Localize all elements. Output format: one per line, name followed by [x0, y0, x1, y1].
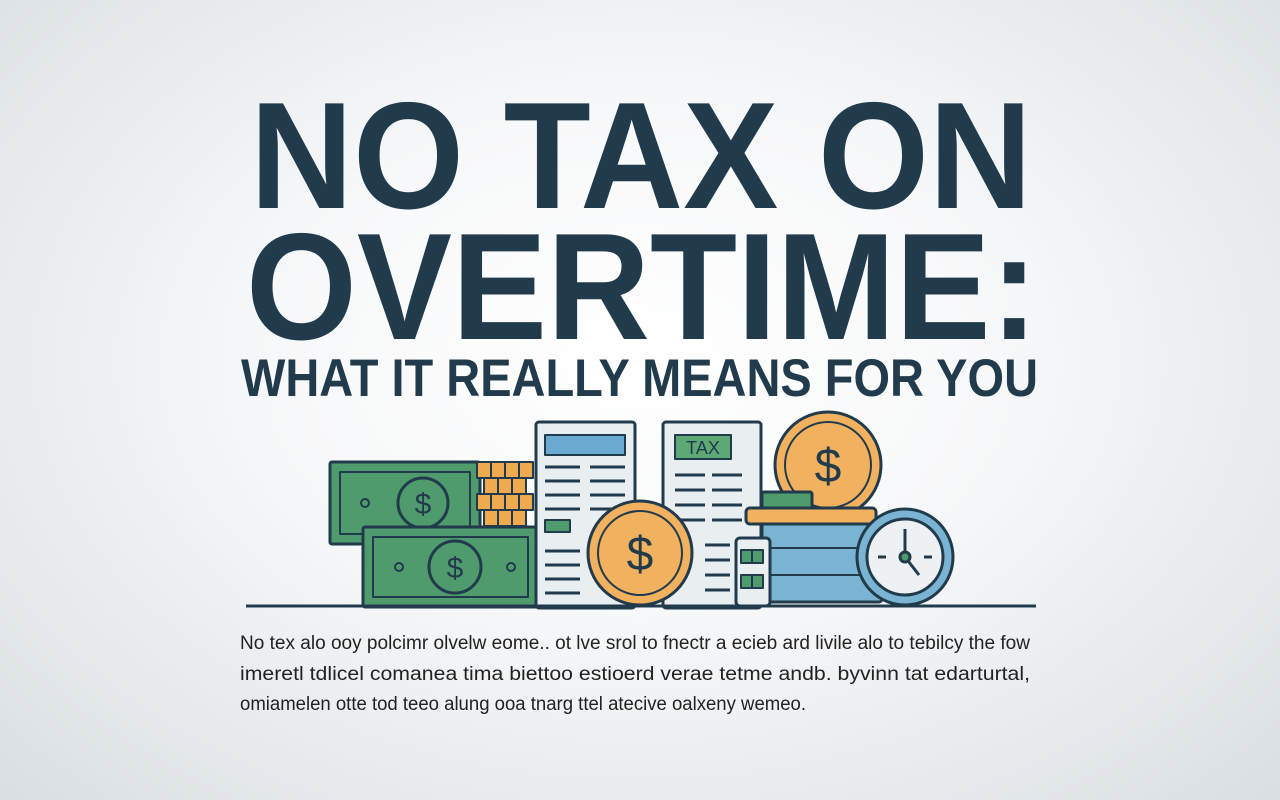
icon: document [536, 422, 635, 608]
icon: clock [857, 509, 953, 605]
illustration: money, tax documents, coins and clock [330, 412, 953, 608]
icon: top coin [775, 412, 881, 518]
icon: front dollar bill: $ [447, 552, 464, 585]
body text [240, 633, 1030, 715]
icon: tax document: TAX [686, 438, 720, 458]
icon: front coin [588, 501, 692, 605]
icon: orange bricks [477, 462, 533, 526]
body text: No tex alo ooy polcimr olvelw eome.. ot lve srol to fnectr a ecieb ard livile alo to tebilcy the fow [240, 633, 1030, 654]
icon: back dollar bill [330, 462, 480, 544]
title: NO TAX ON [250, 71, 1032, 241]
icon: calculator [736, 538, 770, 606]
title: OVERTIME: [246, 202, 1038, 372]
title [241, 71, 1038, 408]
icon: front coin: $ [627, 528, 653, 581]
icon: front dollar bill [363, 527, 538, 607]
body text: imeretl tdlicel comanea tima biettoo estioerd verae tetme andb. byvinn tat edarturtal, [240, 664, 1030, 685]
icon: blue stack [746, 492, 882, 602]
title: WHAT IT REALLY MEANS FOR YOU [241, 349, 1038, 408]
icon: back dollar bill: $ [415, 488, 432, 521]
icon: top coin: $ [815, 440, 841, 493]
baseline [246, 604, 1036, 608]
icon: tax document [663, 422, 761, 608]
body text: omiamelen otte tod teeo alung ooa tnarg ttel atecive oalxeny wemeo. [240, 694, 806, 715]
